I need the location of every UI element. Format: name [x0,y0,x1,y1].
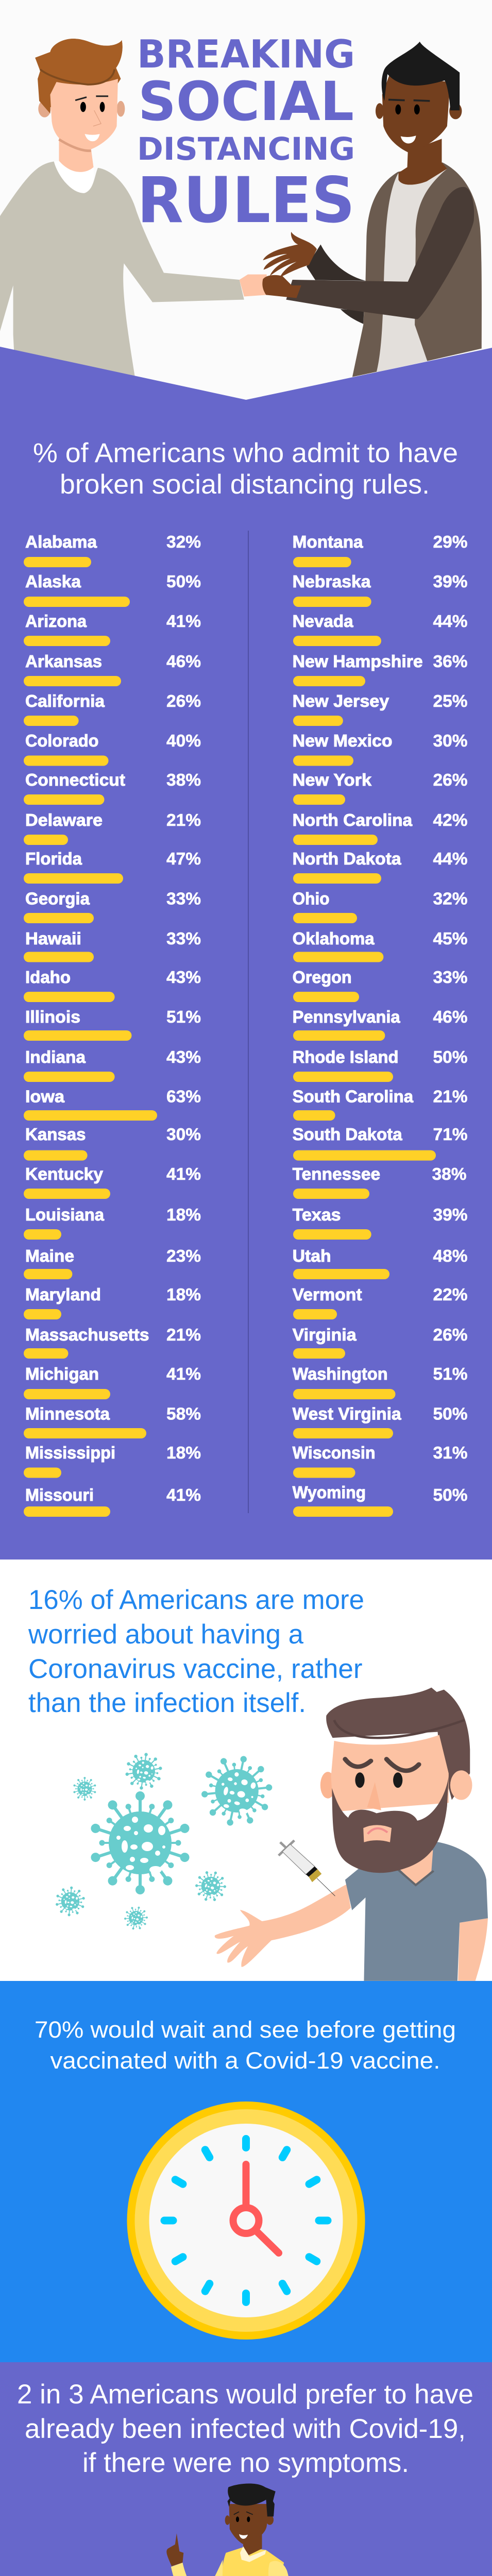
row: Kansas: 30% [166,1125,201,1144]
row: New Hampshire [293,652,468,686]
text: prior infection statistic [17,2379,473,2478]
row: Alaska [24,572,201,607]
text: vaccine worry statistic: worried about having a [28,1619,304,1650]
row: Alabama [24,532,201,567]
text: vaccine worry statistic: than the infection itself. [28,1688,306,1718]
row: Tennessee: 38% [432,1165,467,1184]
row: Montana: 29% [433,533,468,552]
row: Vermont: 22% [433,1285,468,1304]
row: Mississippi [24,1443,201,1478]
row: Rhode Island [293,1047,468,1082]
row: Indiana [24,1047,201,1082]
row: South Carolina: South Carolina [293,1087,414,1106]
row: Utah: 48% [433,1247,468,1266]
row: Missouri: Missouri [25,1485,94,1504]
row: Virginia: 26% [433,1326,468,1345]
row: New Mexico: New Mexico [293,731,393,750]
row: Arkansas: Arkansas [25,652,102,671]
row: Wisconsin: Wisconsin [293,1443,376,1462]
row: New Hampshire: New Hampshire [293,652,423,671]
row: Oregon [293,968,468,1002]
row: Arizona [24,612,201,646]
row: Nebraska: 39% [433,572,468,591]
text: prior infection statistic: already been infected with Covid-19, [25,2414,466,2444]
row: Mississippi: 18% [166,1444,201,1463]
row: Delaware [24,810,201,845]
icon: syringe [279,1840,335,1896]
row: Kansas: Kansas [25,1125,86,1144]
row: South Dakota [293,1125,468,1161]
row: California: 26% [166,692,201,711]
row: North Carolina: North Carolina [293,810,413,829]
text: prior infection statistic: if there were no symptoms. [82,2448,409,2478]
row: Idaho [24,968,201,1002]
row: Alaska: Alaska [25,572,81,591]
row: Arkansas: 46% [166,652,201,671]
row: Washington [293,1364,468,1399]
row: Kentucky: 41% [166,1165,201,1184]
row: Nevada [293,612,468,646]
row: Pennsylvania [293,1007,468,1041]
row: Alabama: 32% [166,533,201,552]
row: Colorado: 40% [166,732,201,751]
row: Florida: Florida [25,849,82,868]
row: New Mexico: 30% [433,732,468,751]
row: Maine: 23% [166,1247,201,1266]
row: South Dakota: 71% [433,1125,468,1144]
row: West Virginia: West Virginia [293,1404,401,1423]
row: Arkansas [24,652,201,686]
row: Indiana: Indiana [25,1047,86,1066]
panel: state statistics [0,347,492,1560]
row: Wyoming: 50% [433,1486,468,1505]
chart: right column states [293,532,468,1517]
row: Alaska: 50% [166,572,201,591]
figure: man pointing up [159,2483,338,2576]
title: DISTANCING [137,131,355,167]
panel: vaccine worry [0,1560,492,1981]
row: Hawaii: Hawaii [25,929,81,948]
row: California: California [25,691,105,710]
row: Michigan [24,1364,201,1399]
panel: header with handshake [0,0,492,412]
row: Maine: Maine [25,1246,74,1265]
row: Kentucky: Kentucky [25,1164,104,1183]
row: South Carolina: 21% [433,1088,468,1107]
text: vaccine worry statistic [28,1585,364,1718]
row: Texas: 39% [433,1206,468,1225]
row: Montana: Montana [293,532,363,551]
row: Wyoming: Wyoming [293,1483,366,1502]
row: Rhode Island: 50% [433,1048,468,1067]
row: Iowa [24,1087,201,1121]
row: Delaware: 21% [166,811,201,830]
panel: wait and see [0,1981,492,2362]
row: Massachusetts: 21% [166,1326,201,1345]
row: Alabama: Alabama [25,532,97,551]
row: Illinois [24,1007,201,1041]
row: Minnesota: Minnesota [25,1404,110,1423]
row: Wisconsin: 31% [433,1444,468,1463]
row: North Carolina: 42% [433,811,468,830]
row: Ohio [293,889,468,923]
row: Colorado: Colorado [25,731,99,750]
row: New Mexico [293,731,468,766]
row: Montana [293,532,468,567]
row: Oklahoma [293,929,468,962]
row: Maryland: Maryland [25,1285,101,1304]
row: Tennessee [293,1164,467,1199]
row: Idaho: Idaho [25,968,71,987]
row: Connecticut: 38% [166,771,201,790]
row: California [24,691,201,726]
row: Maryland: 18% [166,1285,201,1304]
row: Pennsylvania: 46% [433,1008,468,1027]
row: Wyoming [293,1483,468,1517]
row: Arizona: 41% [166,612,201,631]
row: Connecticut [24,770,201,805]
row: Delaware: Delaware [25,810,103,829]
row: Louisiana: Louisiana [25,1205,105,1224]
figure: right man [262,42,482,377]
text: wait and see statistic: vaccinated with a Covid-19 vaccine. [50,2047,440,2074]
row: West Virginia [293,1404,468,1438]
row: Virginia [293,1325,468,1359]
row: North Dakota: North Dakota [293,849,401,868]
row: Vermont [293,1285,468,1319]
row: New Jersey: 25% [433,692,468,711]
chart: left column states [24,532,201,1517]
text: vaccine worry statistic: Coronavirus vaccine, rather [28,1654,363,1684]
row: Washington: Washington [293,1364,388,1383]
row: Minnesota: 58% [166,1404,201,1424]
row: Kansas [24,1125,201,1161]
text: wait and see statistic: 70% would wait and see before getting [35,2016,456,2043]
row: New Hampshire: 36% [433,652,468,671]
row: Nebraska [293,572,468,607]
row: Hawaii: 33% [166,929,201,948]
row: New York: 26% [433,771,468,790]
row: Massachusetts: Massachusetts [25,1325,149,1344]
text: vaccine worry statistic: 16% of Americans are more [28,1585,364,1615]
row: Georgia: Georgia [25,889,90,908]
row: Louisiana: 18% [166,1206,201,1225]
row: Florida [24,849,201,884]
row: Ohio: Ohio [293,889,330,908]
row: Missouri [24,1485,201,1517]
row: New York: New York [293,770,372,789]
row: New Jersey [293,691,468,726]
row: Utah: Utah [293,1246,331,1265]
icon: clock [127,2102,365,2340]
title: SOCIAL [138,70,354,133]
row: Vermont: Vermont [293,1285,362,1304]
figure: worried bearded man [215,1688,488,1981]
illustration: two men shaking hands [0,39,482,377]
row: North Dakota: 44% [433,850,468,869]
row: Colorado [24,731,201,766]
row: Louisiana [24,1205,201,1240]
row: Iowa: Iowa [25,1087,65,1106]
heading: share of Americans: % of Americans who admit to have [33,438,458,468]
row: Kentucky [24,1164,201,1199]
row: Texas [293,1205,468,1240]
row: Minnesota [24,1404,201,1438]
row: Illinois: 51% [166,1008,201,1027]
row: Wisconsin [293,1443,468,1478]
row: Connecticut: Connecticut [25,770,125,789]
row: New Jersey: New Jersey [293,691,389,710]
row: Maine [24,1246,201,1279]
row: Oklahoma: Oklahoma [293,929,375,948]
row: Virginia: Virginia [293,1325,357,1344]
text: wait and see statistic [35,2016,456,2074]
row: Massachusetts [24,1325,201,1359]
icons: coronavirus particles [55,1749,278,1933]
heading: share of Americans: broken social distancing rules. [60,469,430,500]
row: Rhode Island: Rhode Island [293,1047,399,1066]
row: West Virginia: 50% [433,1404,468,1424]
row: Utah [293,1246,468,1279]
row: Oregon: 33% [433,968,468,987]
row: Missouri: 41% [166,1486,201,1505]
row: Iowa: 63% [166,1088,201,1107]
row: Tennessee: Tennessee [293,1164,380,1183]
panel: prefer prior infection [0,2362,492,2576]
row: Idaho: 43% [166,968,201,987]
row: Illinois: Illinois [25,1007,80,1026]
row: Oklahoma: 45% [433,929,468,948]
row: Indiana: 43% [166,1048,201,1067]
title: RULES [137,164,355,237]
row: Michigan: Michigan [25,1364,99,1383]
row: Georgia: 33% [166,889,201,909]
title [137,31,355,237]
row: North Carolina [293,810,468,845]
row: Arizona: Arizona [25,612,87,631]
row: South Carolina [293,1087,468,1121]
row: Ohio: 32% [433,889,468,909]
row: Nebraska: Nebraska [293,572,371,591]
row: North Dakota [293,849,468,884]
row: Texas: Texas [293,1205,341,1224]
row: Oregon: Oregon [293,968,352,987]
figure: left man [0,39,267,377]
row: Washington: 51% [433,1365,468,1384]
row: South Dakota: South Dakota [293,1125,402,1144]
text: prior infection statistic: 2 in 3 Americans would prefer to have [17,2379,473,2410]
row: Nevada: Nevada [293,612,353,631]
row: Maryland [24,1285,201,1319]
divider between columns [248,531,249,1513]
row: New York [293,770,468,805]
row: Florida: 47% [166,850,201,869]
row: Mississippi: Mississippi [25,1443,115,1462]
row: Michigan: 41% [166,1365,201,1384]
row: Hawaii [24,929,201,962]
heading: share of Americans [33,438,458,500]
title: BREAKING [137,31,355,77]
row: Georgia [24,889,201,923]
row: Pennsylvania: Pennsylvania [293,1007,400,1026]
row: Nevada: 44% [433,612,468,631]
